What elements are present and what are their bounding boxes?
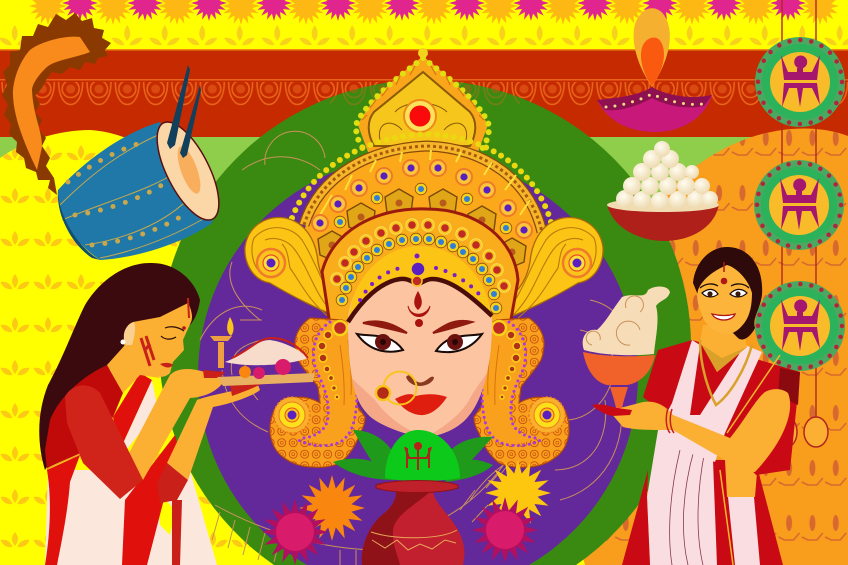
background: green circle: [159, 80, 691, 565]
shoulder red: [643, 340, 800, 475]
smoke: [583, 286, 670, 355]
sash white: [658, 340, 762, 462]
midriff: [725, 460, 758, 497]
hair: [693, 247, 762, 340]
pleat lines: [670, 450, 705, 565]
goddess right lock: [474, 318, 569, 467]
background: top leaf pattern: [0, 0, 848, 49]
top marigold row: [29, 0, 839, 25]
plate: [217, 373, 315, 386]
goddess left lock: [270, 318, 365, 467]
sari back strip: [172, 500, 182, 565]
hair: [39, 263, 200, 470]
background: band top line: [0, 49, 848, 50]
face: [124, 303, 192, 377]
kalash pot with leaves: [333, 430, 493, 565]
crown finial: [356, 48, 489, 152]
sleeve: [65, 385, 143, 499]
flower: magenta left: [262, 499, 328, 565]
icon: dhak drum: [58, 65, 231, 260]
nose ring: [384, 372, 416, 404]
cuff: [157, 463, 188, 503]
eyes: [357, 334, 403, 352]
icon: hanging emblem 2: [754, 160, 844, 250]
background: purple circle: [198, 155, 638, 565]
blouse edge: [47, 453, 82, 469]
background: orange shape right: [540, 129, 848, 565]
background: yellow left shape: [0, 130, 320, 565]
lips: [395, 394, 447, 415]
diya flame: [227, 317, 234, 336]
icon: hanging emblem 1: [755, 37, 845, 127]
flower: orange: [299, 475, 365, 541]
neck: [107, 345, 160, 393]
sash: [113, 373, 152, 450]
burner bowl: [583, 352, 655, 385]
blouse: [45, 365, 123, 470]
skirt left red: [622, 470, 650, 565]
top magenta flower row: [62, 0, 806, 21]
sari right pleat gap: [157, 490, 175, 535]
neck: [700, 325, 747, 372]
offering shell: [225, 340, 308, 365]
eyebrows: [363, 321, 472, 333]
icon: hanging ovals: [777, 417, 828, 447]
skirt right white: [728, 497, 760, 565]
sari center border: [122, 435, 178, 565]
crown arch: [292, 134, 552, 300]
icon: bowl of sweets: [607, 141, 719, 241]
crown wing left: [245, 218, 352, 322]
skirt white: [647, 430, 717, 565]
background: ornamental line: [0, 79, 848, 80]
arm: [610, 389, 790, 472]
background: red band: [0, 49, 848, 137]
flower: yellow: [485, 460, 551, 526]
sari skirt: [45, 470, 217, 565]
sash white: [120, 380, 158, 450]
icon: hanging emblem 3: [755, 281, 845, 371]
far arm: [167, 385, 260, 480]
near arm: [128, 369, 225, 480]
small diya: [210, 336, 232, 368]
bindi: [408, 291, 430, 327]
icon: hanging strings: [782, 0, 816, 420]
burner stem: [610, 387, 628, 408]
skirt red border: [713, 460, 783, 565]
crown wing right: [496, 218, 603, 322]
bangle: [666, 408, 674, 433]
face: [697, 265, 752, 334]
darker sleeve: [778, 368, 800, 405]
icon: feather: [2, 13, 111, 195]
chest shade: [702, 345, 747, 372]
red fingers: [592, 404, 632, 416]
goddess face: [348, 246, 492, 437]
flower: magenta right: [472, 497, 538, 563]
woman right: [583, 247, 800, 565]
smoke swirl lines: [586, 296, 643, 345]
decorative line work on purple: [200, 131, 623, 565]
woman left: [39, 263, 315, 565]
icon: diya lamp: [597, 8, 712, 132]
nails: [203, 370, 262, 396]
nose: [406, 375, 434, 386]
crown scalloped band: [322, 209, 518, 325]
background: light green band: [0, 136, 848, 286]
sash yellow line: [727, 355, 780, 433]
yellow line: [720, 470, 733, 565]
necklace: [700, 340, 752, 405]
sari left border: [45, 455, 80, 565]
background: faint arches over green: [330, 82, 520, 108]
background: arch ornament: [0, 82, 848, 108]
